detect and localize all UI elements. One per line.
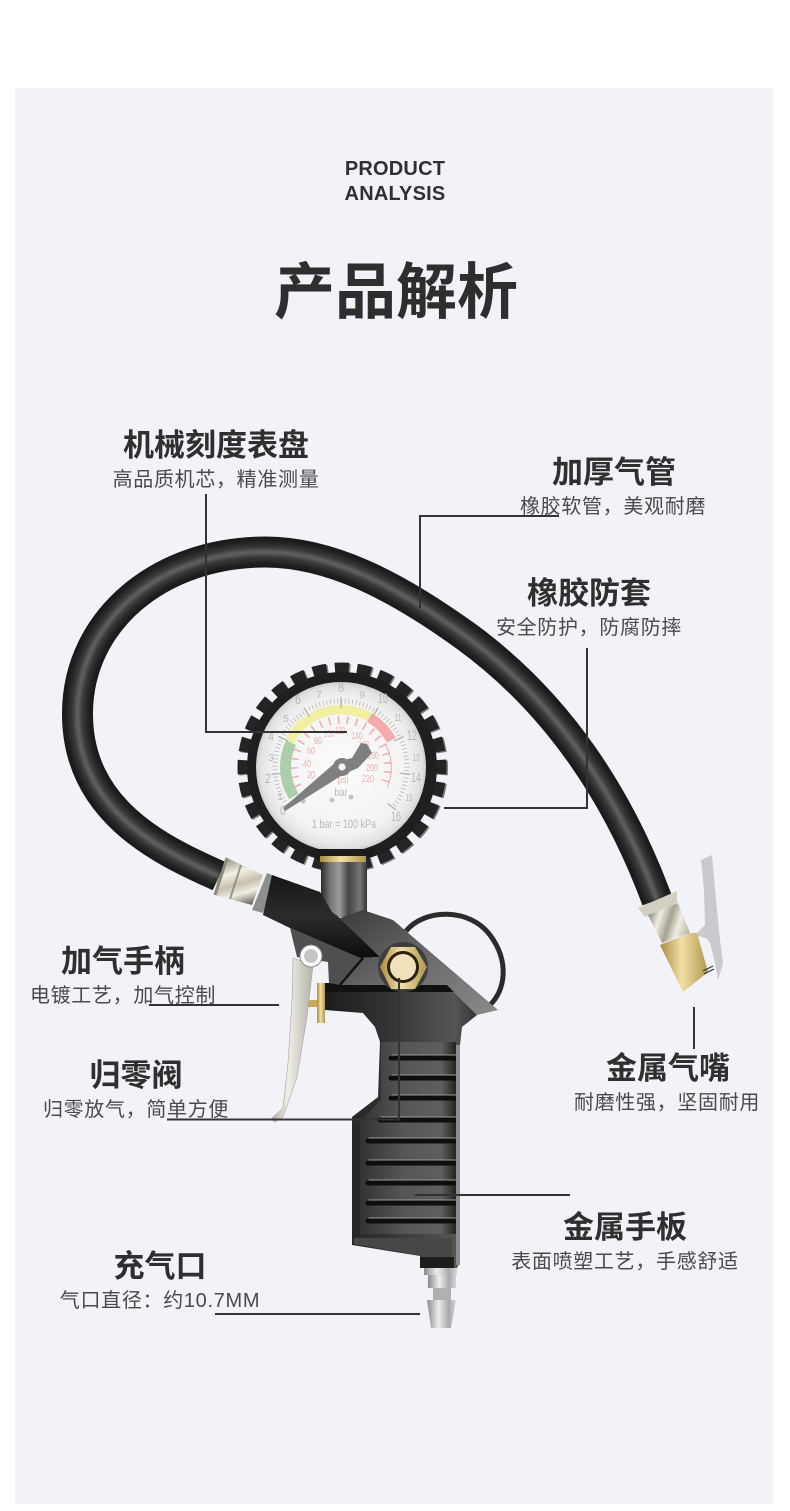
right chuck: [638, 855, 723, 992]
label: metal chuck: [574, 1051, 760, 1114]
pressure scale ticks: [271, 697, 411, 810]
psi numbers: [303, 726, 379, 786]
label: thick hose: 橡胶软管，美观耐磨: [520, 495, 706, 518]
label: rubber guard: [496, 576, 682, 639]
chuck chrome body: [648, 903, 690, 943]
air inlet nozzle: [424, 1268, 457, 1328]
label: air inlet: 充气口: [114, 1249, 206, 1284]
psi numbers: 140: [352, 731, 363, 742]
bar numbers: 10: [378, 690, 388, 706]
label: rubber guard: 橡胶防套: [527, 576, 651, 611]
bar numbers: 16: [391, 808, 401, 824]
bar numbers: 15: [406, 793, 413, 804]
trigger: [271, 945, 328, 1122]
colour bands: [285, 709, 391, 796]
psi numbers: 60: [307, 746, 315, 757]
label: zero valve: 归零阀: [90, 1058, 182, 1093]
label: metal chuck: 金属气嘴: [606, 1051, 730, 1086]
label: rubber guard: 安全防护，防腐防摔: [496, 616, 682, 639]
back loop hose: [406, 914, 503, 1005]
upper plate: [340, 910, 498, 1015]
grip panel: [360, 1042, 456, 1234]
label: metal plate: [511, 1210, 739, 1273]
grip bottom wedge: [354, 1238, 452, 1262]
scale unit text: [300, 787, 376, 831]
label: mechanical dial: 机械刻度表盘: [123, 428, 309, 463]
gauge: [243, 668, 442, 867]
psi numbers: 20: [307, 770, 315, 781]
label: zero valve: 归零放气，简单方便: [43, 1098, 229, 1121]
leader: rubber guard: [444, 648, 587, 808]
hose: [77, 552, 657, 900]
psi numbers: 120: [335, 726, 345, 737]
lower wedge behind trigger: [290, 928, 363, 985]
bar numbers: 1: [277, 792, 283, 803]
needle: [283, 743, 372, 811]
label: air inlet: 气口直径：约10.7MM: [60, 1289, 260, 1312]
label: mechanical dial: 高品质机芯，精准测量: [113, 468, 319, 491]
gauge face: [256, 682, 426, 852]
bar numbers: 7: [316, 690, 322, 701]
psi numbers: 180: [368, 751, 379, 762]
psi numbers: 160: [358, 740, 370, 751]
psi numbers: 100: [324, 729, 334, 740]
label: metal plate: 表面喷塑工艺，手感舒适: [511, 1250, 739, 1273]
gun body: [263, 875, 498, 1268]
bar numbers: 2: [265, 770, 271, 786]
label: handle: 电镀工艺，加气控制: [30, 984, 216, 1007]
subtitle: product analysis: [345, 158, 445, 205]
grip: [325, 983, 477, 1268]
label: handle: 加气手柄: [61, 944, 185, 979]
label: thick hose: [520, 455, 706, 518]
bar numbers: 9: [359, 690, 365, 701]
leader: handle: [149, 1004, 279, 1006]
chuck lever: [695, 855, 723, 980]
bar numbers: 6: [295, 691, 301, 707]
grip right edge: [456, 1045, 460, 1265]
label: zero valve: [43, 1058, 229, 1121]
leader: gauge: [206, 494, 347, 732]
leader: hose: [420, 516, 559, 608]
psi numbers: 200: [366, 763, 378, 774]
label: handle: [30, 944, 216, 1007]
bolt: [378, 942, 428, 992]
leader: inlet: [215, 1313, 420, 1315]
psi numbers: 80: [314, 736, 322, 747]
bar numbers: 11: [394, 713, 402, 724]
scale unit text: 1 bar = 100 kPa: [312, 817, 376, 831]
inlet tube: [263, 875, 380, 958]
psi scale ticks: [294, 720, 391, 794]
bar numbers: 5: [283, 714, 289, 725]
bar numbers: 8: [338, 679, 344, 695]
leader: metal plate: [415, 1194, 570, 1196]
title: 产品解析: [274, 258, 518, 326]
psi numbers: psi: [338, 775, 348, 786]
bar numbers: 12: [407, 727, 417, 743]
plate seam: [340, 958, 363, 985]
label: metal plate: 金属手板: [563, 1210, 687, 1245]
chuck brass body: [660, 933, 708, 992]
label: air inlet: [60, 1249, 260, 1312]
bar numbers: 13: [412, 753, 420, 764]
bar numbers: 3: [268, 753, 274, 764]
label: metal chuck: 耐磨性强，坚固耐用: [574, 1091, 760, 1114]
scale unit text: bar: [334, 787, 348, 799]
left hose coupling: [215, 858, 277, 913]
leader: zero valve: [167, 978, 399, 1120]
grip ribs: [368, 1055, 457, 1221]
bar numbers: 0: [280, 802, 286, 818]
bar numbers: 4: [268, 729, 274, 744]
subtitle: product analysis: ANALYSIS: [345, 183, 445, 205]
psi numbers: 220: [362, 774, 374, 785]
gauge rubber bezel: [243, 668, 442, 867]
leader: metal chuck: [693, 1007, 695, 1049]
chuck collar: [638, 891, 677, 917]
bar numbers: 14: [411, 769, 421, 785]
label: mechanical dial: [113, 428, 319, 491]
bar numbers: [265, 679, 421, 824]
grip top band: [325, 983, 455, 992]
subtitle: product analysis: PRODUCT: [345, 158, 445, 180]
label: thick hose: 加厚气管: [552, 455, 676, 490]
gauge stem: [313, 849, 373, 917]
psi numbers: 40: [303, 759, 311, 770]
